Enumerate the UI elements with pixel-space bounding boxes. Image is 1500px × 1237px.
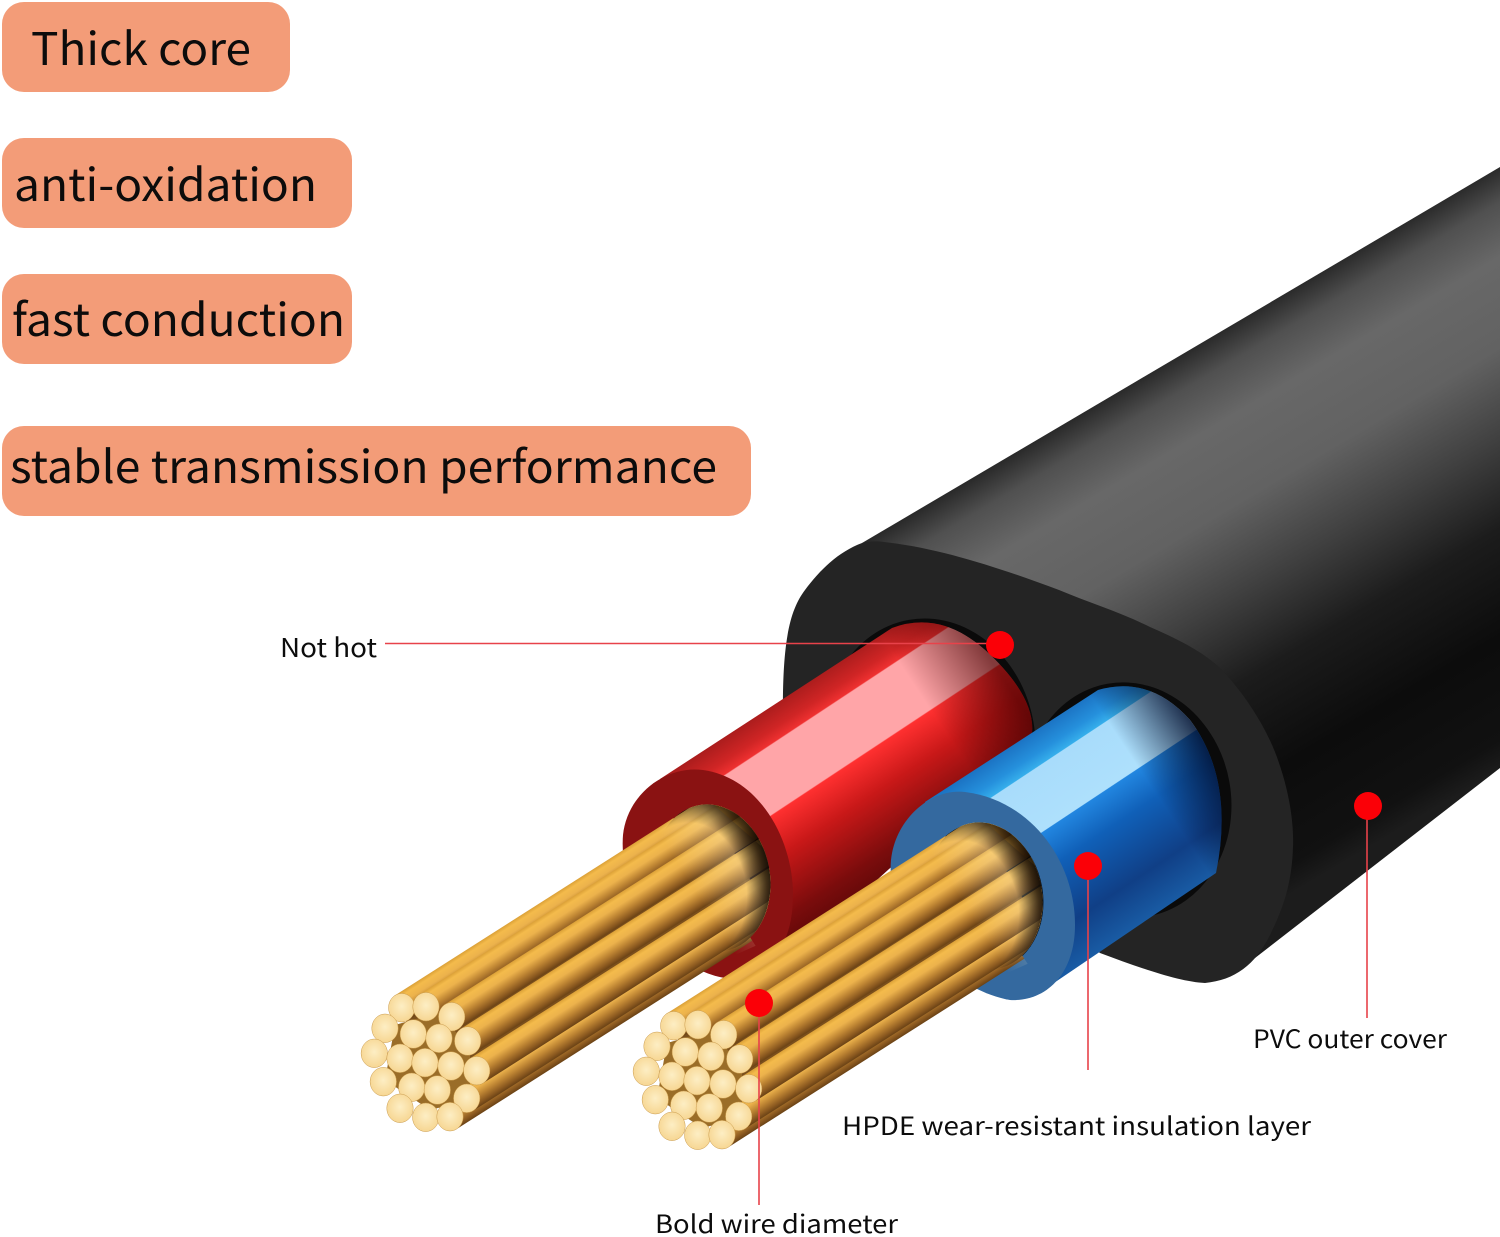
pill: stable transmission performance: stable transmission performance bbox=[10, 431, 717, 496]
cable illustration bbox=[361, 167, 1500, 1150]
callout: HPDE insulation layer: HPDE wear-resistant insulation layer bbox=[842, 1107, 1311, 1143]
pill: Thick core bbox=[2, 2, 290, 92]
pill: anti-oxidation bbox=[2, 138, 352, 228]
pill: fast conduction: fast conduction bbox=[12, 284, 345, 349]
callout: Not hot: Not hot bbox=[280, 628, 377, 665]
callout: Bold wire diameter bbox=[655, 989, 898, 1237]
callout: HPDE insulation layer bbox=[842, 852, 1311, 1143]
callout: Not hot bbox=[280, 628, 1014, 665]
red insulated conductor bbox=[623, 622, 1032, 978]
cable front face bbox=[783, 541, 1293, 983]
callout: PVC outer cover: PVC outer cover bbox=[1253, 1020, 1447, 1056]
black PVC cable body bbox=[862, 167, 1500, 958]
blue insulated conductor bbox=[891, 686, 1222, 1000]
pill: anti-oxidation: anti-oxidation bbox=[14, 149, 317, 214]
pill: stable transmission performance bbox=[2, 426, 751, 516]
pill: fast conduction bbox=[2, 274, 352, 364]
copper strands: red conductor bbox=[361, 769, 838, 1132]
pill: Thick core: Thick core bbox=[31, 13, 251, 78]
copper strands: blue conductor bbox=[633, 787, 1110, 1150]
callout: PVC outer cover bbox=[1253, 792, 1447, 1056]
